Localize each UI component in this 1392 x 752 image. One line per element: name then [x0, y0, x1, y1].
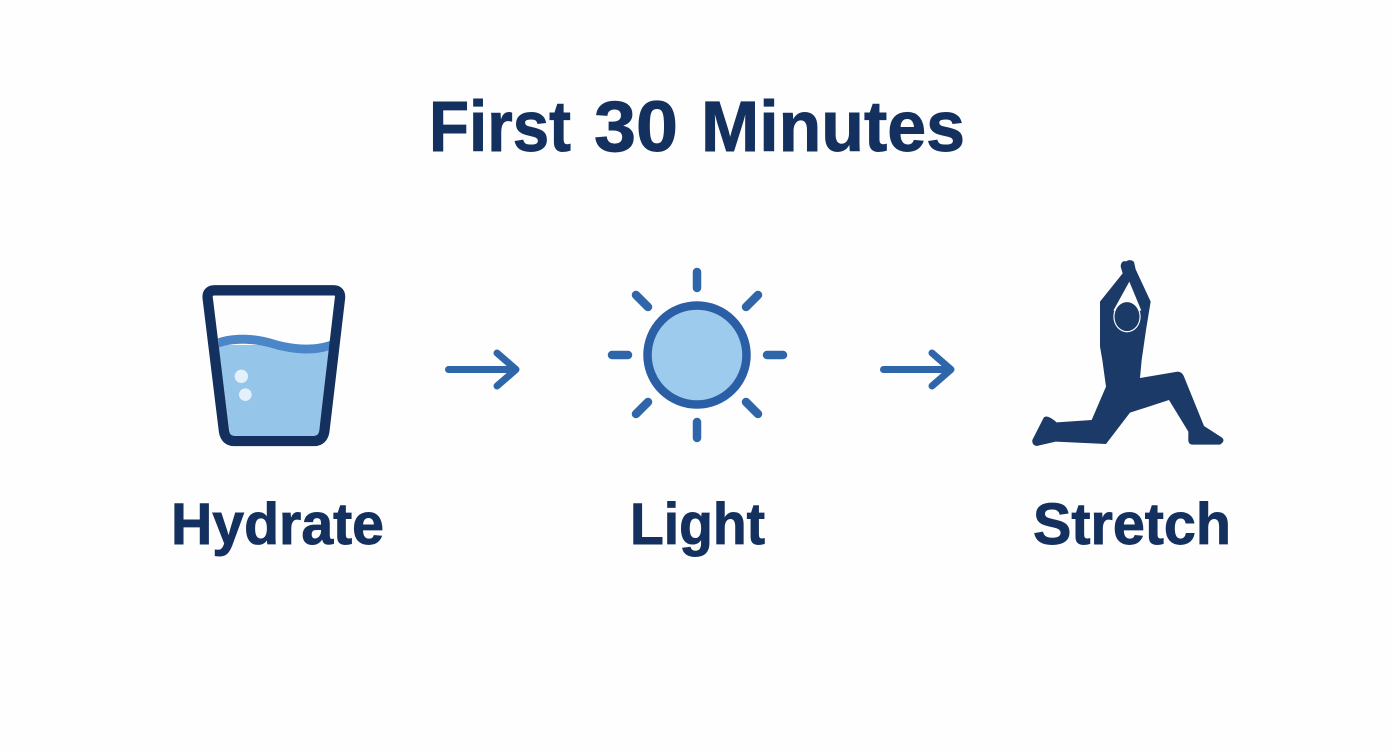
- title: 30: [594, 88, 678, 167]
- bubble: [235, 370, 248, 383]
- bubble: [239, 388, 252, 401]
- glass outline: [208, 290, 340, 441]
- icon: stretching figure: [1032, 260, 1223, 446]
- body silhouette: [1032, 260, 1223, 446]
- label: Stretch: Stretch: [1033, 492, 1231, 557]
- head: [1114, 302, 1139, 331]
- icon: sun: [612, 272, 783, 438]
- label: Hydrate: Hydrate: [171, 492, 384, 557]
- sun rays: [612, 272, 783, 438]
- water fill: [218, 345, 331, 436]
- gap between arms: [1113, 282, 1141, 311]
- title: First: [429, 88, 571, 167]
- water surface wave: [218, 335, 331, 353]
- label: Light: Light: [630, 492, 765, 557]
- sun disc: [648, 306, 746, 404]
- head outline: [1113, 301, 1141, 332]
- icon: glass of water: [208, 290, 340, 441]
- title: Minutes: [701, 88, 965, 167]
- arrow: hydrate to light: [448, 353, 516, 386]
- arrow: light to stretch: [884, 353, 951, 386]
